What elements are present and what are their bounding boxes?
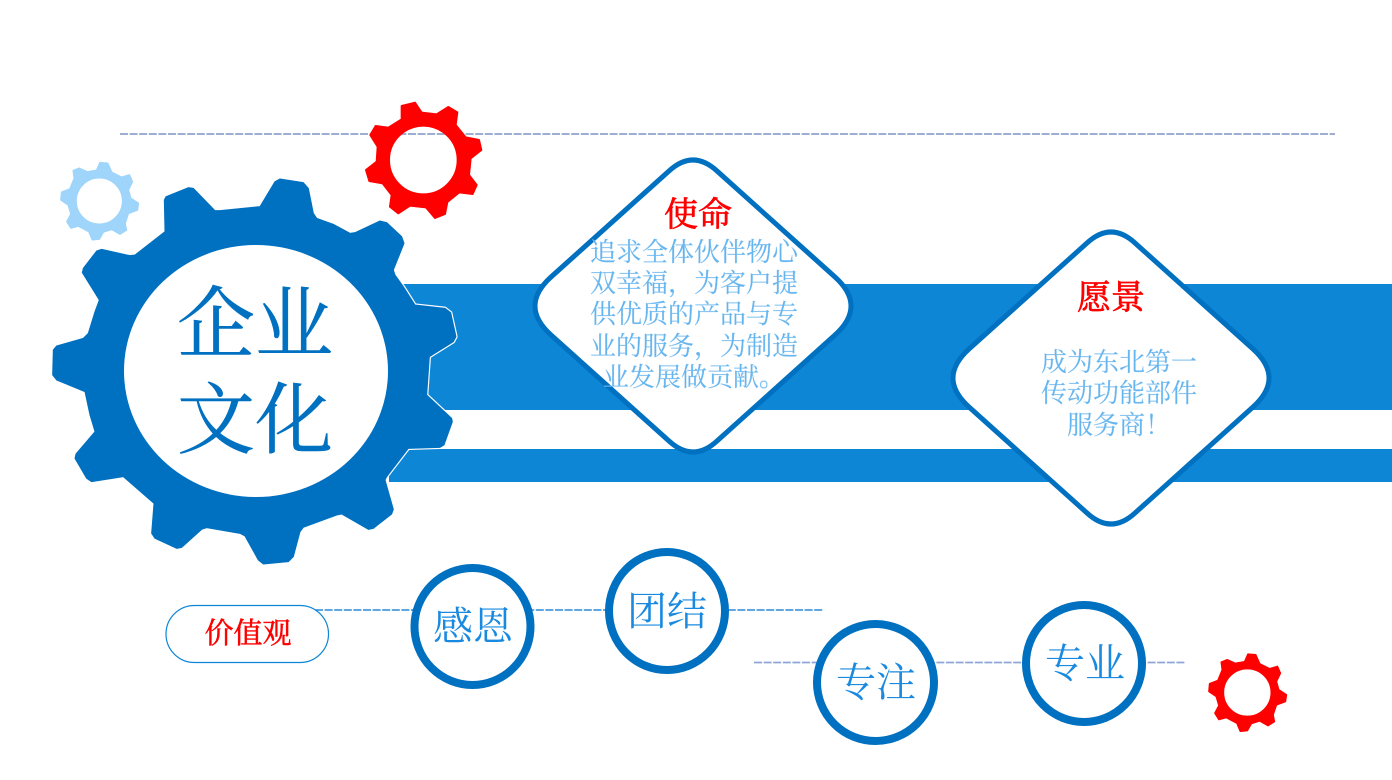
value: 专注: 专注 bbox=[836, 660, 916, 705]
value: 团结: 团结 bbox=[627, 589, 707, 634]
value: 感恩 bbox=[414, 568, 530, 685]
text block: mission: 双幸福，为客户提 bbox=[590, 269, 798, 298]
text block: mission: 业发展做贡献。 bbox=[603, 363, 785, 392]
value: 团结 bbox=[609, 552, 725, 670]
text block: vision: 服务商！ bbox=[1067, 411, 1171, 440]
title: 企业文化 bbox=[177, 281, 333, 464]
heading: 使命: 使命 bbox=[664, 196, 732, 234]
text block: mission: 追求全体伙伴物心 bbox=[590, 238, 799, 267]
label: 价值观 pill: 价值观 bbox=[204, 617, 292, 650]
text block: vision: 成为东北第一 bbox=[1041, 348, 1197, 377]
value: 专注 bbox=[817, 624, 934, 741]
panel: vision diamond bbox=[953, 232, 1269, 524]
band: upper blue bar bbox=[400, 284, 1392, 410]
band: lower blue bar bbox=[389, 449, 1392, 482]
value: 感恩: 感恩 bbox=[433, 604, 514, 649]
icon: light blue gear bbox=[61, 163, 138, 240]
title: 企业文化: 文化 bbox=[177, 377, 333, 464]
icon: small red gear bbox=[1209, 654, 1286, 731]
text block: vision bbox=[1041, 348, 1197, 440]
heading: 愿景: 愿景 bbox=[1077, 280, 1145, 317]
icon: red gear top bbox=[366, 103, 481, 218]
icon: large blue gear bbox=[53, 179, 456, 564]
text block: mission: 供优质的产品与专 bbox=[590, 300, 798, 329]
text block: mission: 业的服务，为制造 bbox=[590, 332, 798, 361]
label: 价值观 pill bbox=[166, 606, 328, 662]
title: 企业文化: 企业 bbox=[177, 281, 333, 368]
text block: mission bbox=[590, 238, 799, 392]
value: 专业 bbox=[1026, 605, 1142, 722]
value: 专业: 专业 bbox=[1045, 641, 1125, 686]
text block: vision: 传动功能部件 bbox=[1041, 379, 1197, 408]
panel: mission diamond bbox=[535, 160, 851, 452]
